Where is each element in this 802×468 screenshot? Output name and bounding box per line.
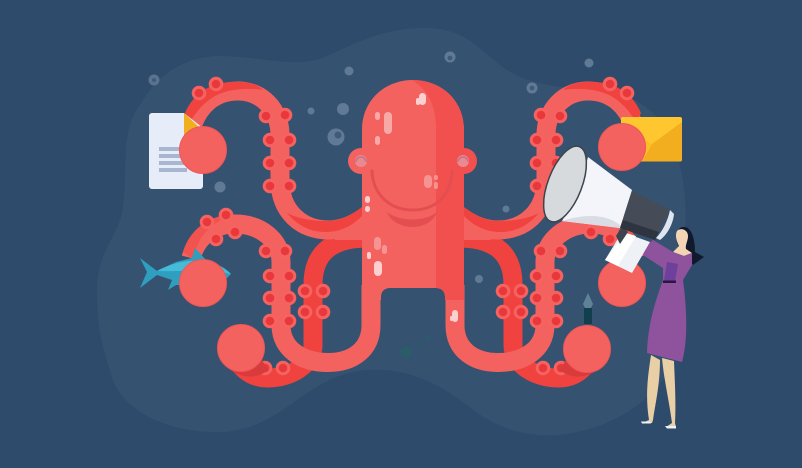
- hair: [676, 227, 704, 265]
- dark body: [620, 191, 670, 240]
- lower light arm: [191, 224, 371, 362]
- belt: [663, 280, 676, 283]
- left leg: [642, 355, 660, 423]
- right shoe: [665, 426, 676, 428]
- left ear: [348, 148, 374, 174]
- bubbles: [148, 52, 594, 283]
- right ear: [451, 148, 477, 174]
- body right shade: [412, 80, 464, 300]
- right arms: [455, 77, 643, 378]
- ball shadows: [228, 360, 600, 377]
- pen nib: [583, 293, 593, 324]
- mouth: [535, 141, 595, 227]
- left arms: [183, 77, 371, 378]
- suckers: [192, 77, 330, 375]
- faint seaweed mark: [400, 336, 431, 358]
- left shoe: [641, 422, 651, 424]
- background blob: [97, 28, 685, 435]
- dress: [643, 240, 692, 362]
- long dark arm: [238, 238, 368, 378]
- rim: [656, 210, 674, 240]
- smile: [372, 171, 452, 210]
- upper arm dark crescent: [185, 82, 263, 122]
- right leg: [662, 358, 676, 427]
- woman: [641, 227, 704, 428]
- body: [362, 80, 464, 300]
- horn: [562, 157, 632, 228]
- lower arm shade: [183, 214, 235, 258]
- upper light arm: [190, 91, 366, 230]
- chin line: [387, 212, 437, 227]
- octopus arms: [183, 77, 643, 378]
- octopus head and body: [348, 80, 477, 322]
- handle: [605, 232, 650, 273]
- shark: [140, 248, 231, 290]
- sleeve shade: [664, 262, 678, 281]
- highlights: [365, 93, 458, 322]
- arm to body joint: [335, 205, 366, 240]
- envelope: [621, 117, 682, 162]
- megaphone: [535, 141, 674, 273]
- document: [149, 113, 203, 189]
- upper arm dark lower band: [287, 207, 362, 232]
- arm tip balls: [180, 124, 646, 372]
- neck and face: [673, 229, 692, 256]
